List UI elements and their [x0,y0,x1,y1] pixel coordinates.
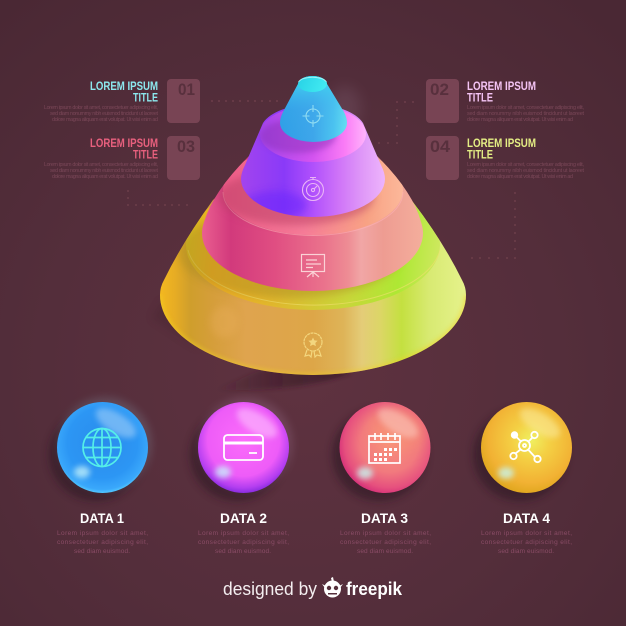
icon: calendar [369,433,400,463]
body text 04: sed diam nonummy nibh euismod tincidunt ut laoreet [467,168,584,174]
body text 01: sed diam nonummy nibh euismod tincidunt ut laoreet [50,111,158,117]
body text 03: Lorem ipsum dolor sit amet, consectetuer adipiscing elit, [44,162,158,168]
icon: globe [83,428,121,466]
title 02: TITLE [467,92,493,104]
legend item 02 [426,79,584,123]
title 04: LOREM IPSUM [467,138,536,150]
card 03 [167,136,200,180]
data 3 label: consectetuer adipiscing elit, [340,539,431,546]
sphere data 1 [49,397,152,501]
title 01: LOREM IPSUM [90,81,158,93]
icon: freepik logo [322,577,343,598]
data 2 label: sed diam euismod. [215,548,271,555]
icon: network nodes [510,432,541,462]
body text 03: dolore magna aliquam erat volutpat. Ut wisi enim ad [52,174,158,180]
body text 01: Lorem ipsum dolor sit amet, consectetuer adipiscing elit, [44,105,158,111]
purple tier [241,104,385,219]
body text 01 [44,105,158,123]
card 04 [426,136,459,180]
data 3 label [340,510,431,555]
title 04 [467,138,536,162]
data 1 label: consectetuer adipiscing elit, [57,539,148,546]
data 1 label: sed diam euismod. [74,548,130,555]
body text 02 [467,105,584,123]
data 4 label: consectetuer adipiscing elit, [481,539,572,546]
title 03 [90,138,158,162]
pyramid shadow [152,86,361,390]
card 02: 02 [430,80,449,99]
footer: designed by freepik: freepik [346,579,403,599]
icon: stopwatch [302,178,324,200]
footer: designed by freepik [223,577,403,599]
body text 04: Lorem ipsum dolor sit amet, consectetuer adipiscing elit, [467,162,584,168]
card 03: 03 [177,137,195,156]
icon: award badge [304,333,322,357]
sphere data 2 [190,397,293,501]
legend item 04 [426,136,584,180]
legend item 03 [44,136,200,180]
title 04: TITLE [467,150,493,162]
data 1 label: DATA 1 [80,510,124,526]
title 01: TITLE [133,92,158,104]
body text 03 [44,162,158,180]
body text 02: sed diam nonummy nibh euismod tincidunt ut laoreet [467,111,584,117]
pyramid [152,76,468,390]
card 02 [426,79,459,123]
pink tier [202,156,423,291]
body text 02: Lorem ipsum dolor sit amet, consectetuer adipiscing elit, [467,105,584,111]
data 1 label: Lorem ipsum dolor sit amet, [57,530,148,537]
blue tier [280,76,347,142]
sphere data 3 [332,402,430,501]
body text 04 [467,162,584,180]
data 4 label: DATA 4 [503,510,550,526]
legend item 01 [44,79,200,123]
data 4 label: Lorem ipsum dolor sit amet, [481,530,572,537]
icon: credit card [224,435,263,460]
yellow tier [160,198,466,375]
title 03: TITLE [133,150,158,162]
data 2 label: DATA 2 [220,510,267,526]
title 02 [467,81,536,104]
data 2 label [198,510,289,555]
icon: target [302,105,324,127]
body text 03: sed diam nonummy nibh euismod tincidunt ut laoreet [50,168,158,174]
title 02: LOREM IPSUM [467,81,536,93]
data 2 label: Lorem ipsum dolor sit amet, [198,530,289,537]
data 1 label [57,510,148,555]
sphere data 4 [473,402,572,501]
card 04: 04 [430,137,451,156]
title 03: LOREM IPSUM [90,138,158,150]
data 3 label: DATA 3 [361,510,408,526]
data 3 label: Lorem ipsum dolor sit amet, [340,530,431,537]
icon: presentation board [302,254,324,277]
footer: designed by freepik: designed by [223,579,317,599]
data 4 label [481,510,572,555]
card 01 [167,79,200,123]
card 01: 01 [178,80,195,99]
data 4 label: sed diam euismod. [498,548,554,555]
body text 01: dolore magna aliquam erat volutpat. Ut wisi enim ad [52,117,158,123]
data 3 label: sed diam euismod. [357,548,413,555]
body text 02: dolore magna aliquam erat volutpat. Ut wisi enim ad [467,117,573,123]
body text 04: dolore magna aliquam erat volutpat. Ut wisi enim ad [467,174,573,180]
title 01 [90,81,158,104]
data 2 label: consectetuer adipiscing elit, [198,539,289,546]
